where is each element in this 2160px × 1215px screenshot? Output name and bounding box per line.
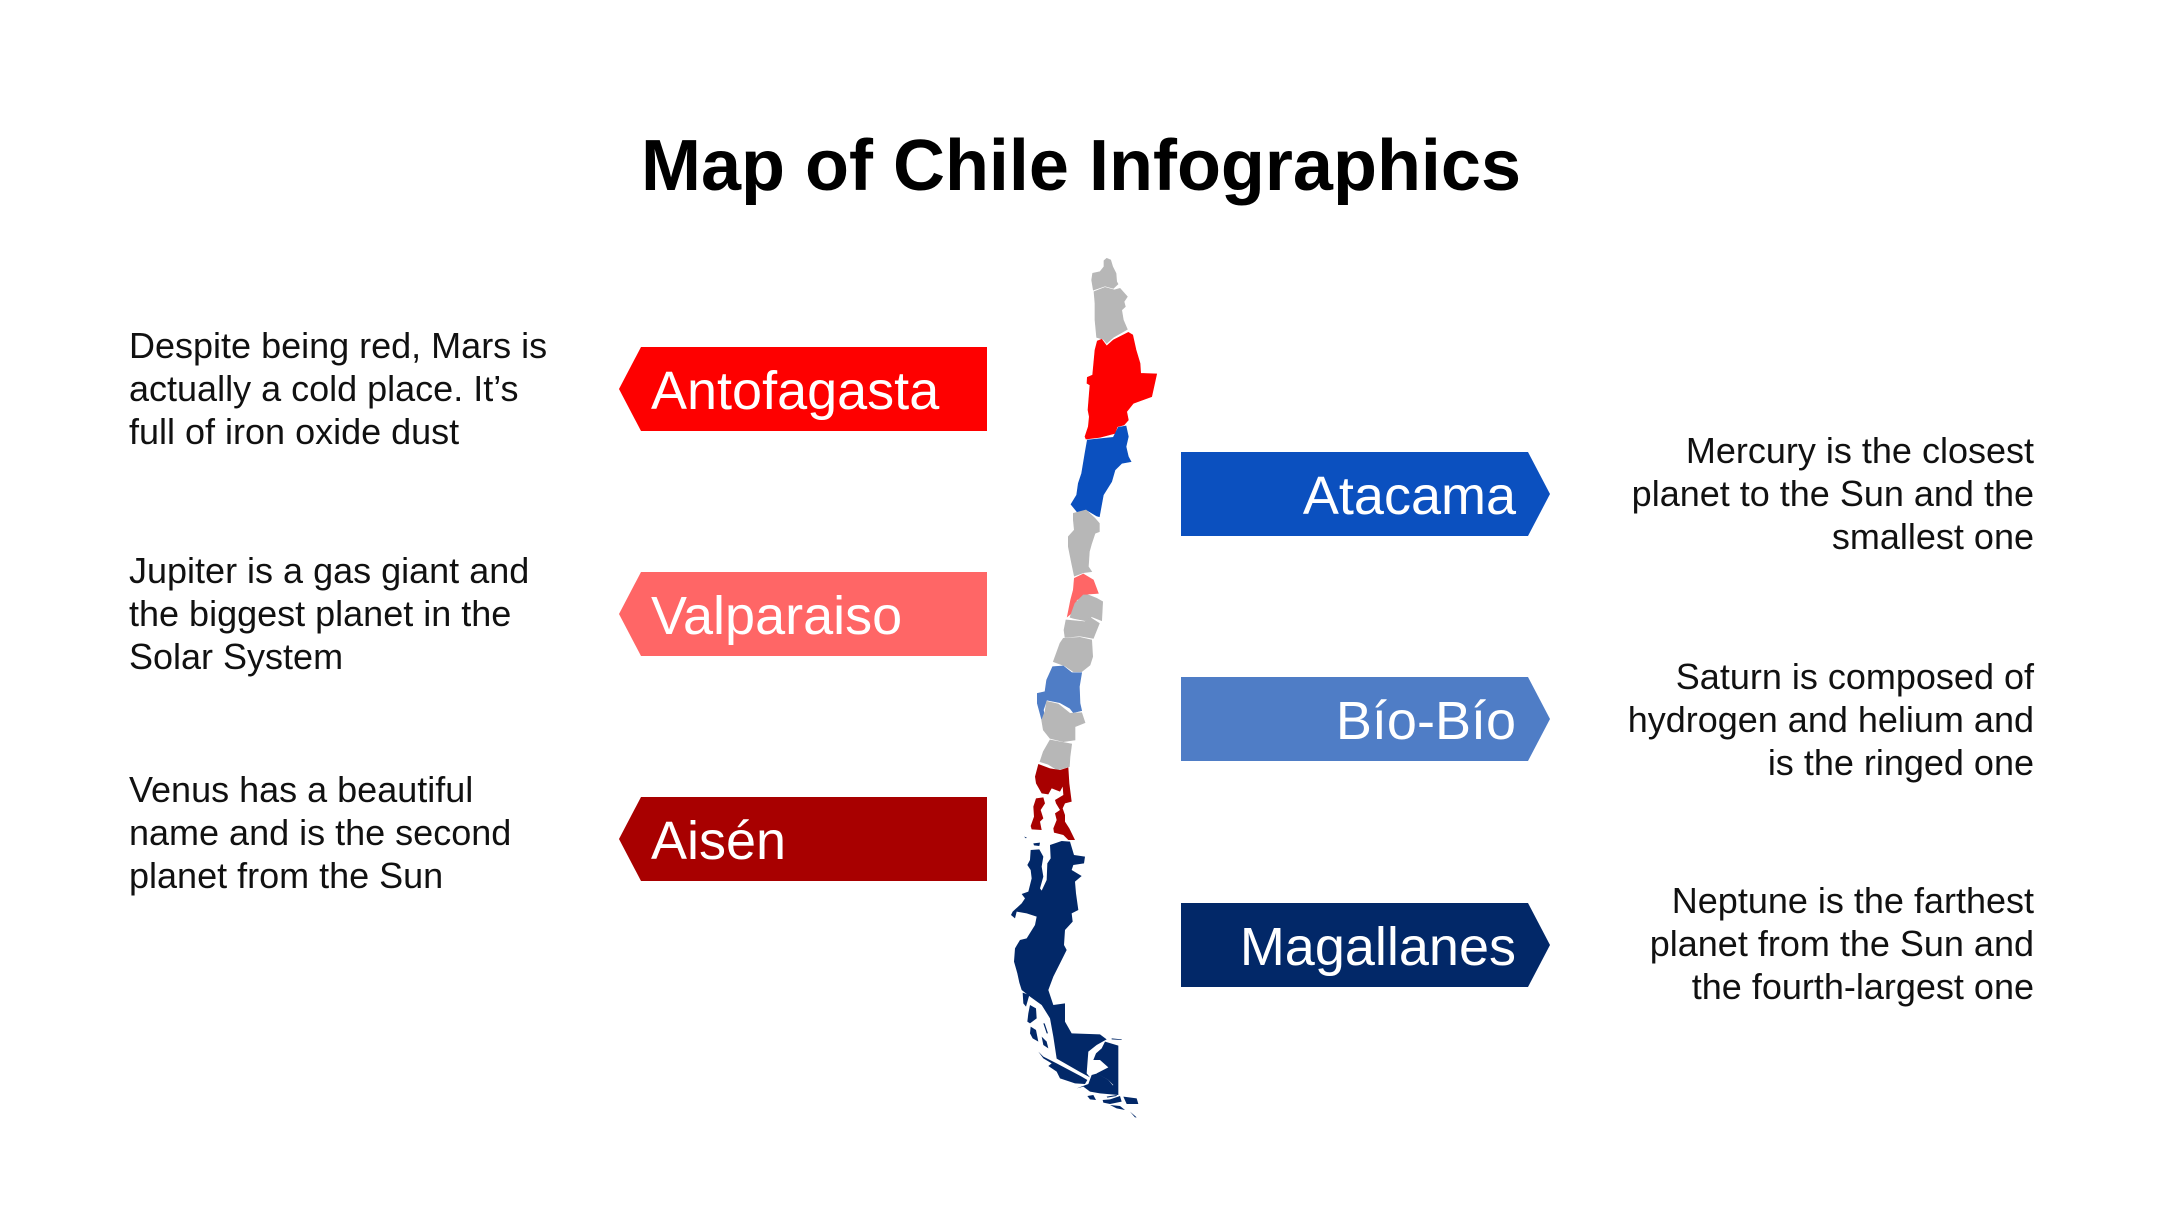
text: Mercury description: planet to the Sun and the [1632, 473, 2034, 514]
region: Aisén [1031, 764, 1075, 840]
banner: Valparaiso [619, 572, 987, 656]
region: O'Higgins [1064, 617, 1099, 638]
region: Santiago [1070, 595, 1103, 621]
region group: northern regions [1071, 258, 1157, 517]
text: Venus description: planet from the Sun [129, 855, 443, 896]
region: Araucanía [1042, 701, 1085, 742]
text: Neptune description: planet from the Sun and [1650, 923, 2034, 964]
region: Valparaiso [1067, 574, 1098, 617]
text: Mars description: actually a cold place. It’s [129, 368, 519, 409]
banner: Valparaiso: Valparaiso [651, 586, 902, 646]
region: Arica y Parinacota [1092, 258, 1118, 290]
banner: Antofagasta [619, 347, 987, 431]
text: Mercury description: smallest one [1832, 516, 2034, 557]
text: Saturn description: is the ringed one [1768, 742, 2034, 783]
text: Neptune description: Neptune is the farthest [1672, 880, 2034, 920]
text: Venus description: name and is the second [129, 812, 511, 853]
banner: Magallanes: Magallanes [1240, 916, 1516, 976]
banner: Bío-Bío: Bío-Bío [1336, 690, 1516, 750]
text: Mars description [129, 324, 547, 452]
text: Jupiter description [129, 550, 529, 677]
text: Jupiter description: the biggest planet in the [129, 593, 511, 634]
text: Mars description: full of iron oxide dust [129, 411, 459, 452]
title: Map of Chile Infographics [641, 126, 1521, 206]
text: Venus description [129, 768, 511, 896]
text: Jupiter description: Solar System [129, 636, 343, 677]
banner: Atacama: Atacama [1303, 466, 1516, 526]
text: Saturn description: hydrogen and helium and [1628, 699, 2034, 740]
text: Mercury description [1632, 430, 2034, 557]
banner: Aisén [619, 797, 987, 881]
region: Magallanes [1011, 837, 1138, 1117]
banner: Aisén: Aisén [651, 810, 786, 870]
banner: Antofagasta: Antofagasta [651, 360, 939, 420]
region: Los Ríos and Los Lagos [1040, 740, 1072, 770]
text: Mercury description: Mercury is the closest [1686, 430, 2034, 470]
region: Antofagasta [1085, 332, 1157, 439]
text: Neptune description: the fourth-largest one [1692, 966, 2034, 1007]
region: Coquimbo [1068, 510, 1099, 576]
banner: Atacama [1181, 452, 1550, 536]
banner: Bío-Bío [1181, 677, 1550, 761]
region: Atacama [1071, 426, 1131, 517]
text: Mars description: Despite being red, Mars is [129, 324, 547, 366]
region group: central regions [1037, 510, 1103, 770]
region: Bío-Bío [1037, 666, 1082, 719]
text: Venus description: Venus has a beautiful [129, 768, 473, 810]
text: Saturn description: Saturn is composed of [1676, 656, 2034, 696]
region: Tarapacá [1094, 287, 1127, 343]
text: Neptune description [1650, 880, 2034, 1007]
text: Jupiter description: Jupiter is a gas giant and [129, 550, 529, 590]
banner: Magallanes [1181, 903, 1550, 987]
region: Maule [1053, 637, 1093, 672]
text: Saturn description [1628, 656, 2034, 783]
